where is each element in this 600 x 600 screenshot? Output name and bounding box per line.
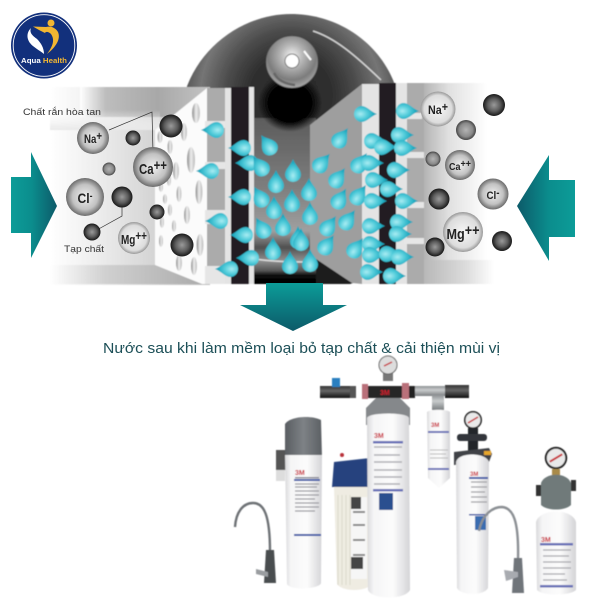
filter C [366,398,410,598]
arrow: downward outflow [240,283,347,331]
tank lower interior [250,118,316,284]
icon: yellow figure [33,20,59,54]
left ions: + [96,129,102,143]
logo: Aqua Health [11,12,77,78]
right ions: Ca [449,162,462,173]
right ions: - [496,187,500,199]
filter D small: 3M [431,423,439,429]
left ions: Ca [139,161,158,178]
faucet left [235,503,276,583]
valve ball [266,36,318,88]
icon: white hands [28,28,44,54]
leader lines [95,112,153,231]
filter A: 3M [295,470,305,477]
left ions: Cl [78,190,92,206]
filter D small [427,410,450,488]
left ions: ++ [135,228,147,243]
right ions: Na [428,103,443,117]
right grey facet [310,84,362,284]
right ions: ++ [460,159,471,170]
dark outlet hole [258,74,322,132]
arrow: left inflow [11,152,57,258]
manifold pipes [320,378,469,410]
filter E with gauge [454,411,492,594]
faucet right [479,507,524,593]
tank [185,14,396,284]
logo wordmark: Aqua Health [21,56,67,65]
left perforated membrane [155,88,207,284]
diagram: softening membrane tank [50,14,494,285]
left ions: - [90,191,92,202]
right ions: Cl [486,190,498,202]
product photo: filter systems [235,356,576,598]
filter F [536,447,576,594]
right ions: Mg [446,226,468,243]
left chamber [50,87,210,285]
right ions [420,92,512,256]
left filter layers [205,87,254,284]
right ions: + [442,100,448,114]
right ions: ++ [465,222,480,239]
label: dissolved solids: Chất rắn hòa tan [23,107,101,118]
arrow: right inflow [517,155,575,261]
filter C: 3M [374,433,384,440]
filter F: 3M [541,537,551,544]
gauge top [379,356,397,381]
right filter layers [362,83,425,284]
manifold pipes: 3M [380,390,390,397]
left ions: Mg [121,232,140,247]
filter E with gauge: 3M [470,472,478,478]
left ions [66,112,194,256]
filter A [276,417,322,588]
left ions: Na [84,132,99,146]
caption: Nước sau khi làm mềm loại bỏ tạp chất & cải thiện mùi vị [103,341,500,357]
left ions: ++ [154,157,167,174]
water drops [196,103,419,284]
right chamber [424,83,494,284]
filter B [332,453,372,590]
label: impurities: Tạp chất [64,244,104,255]
